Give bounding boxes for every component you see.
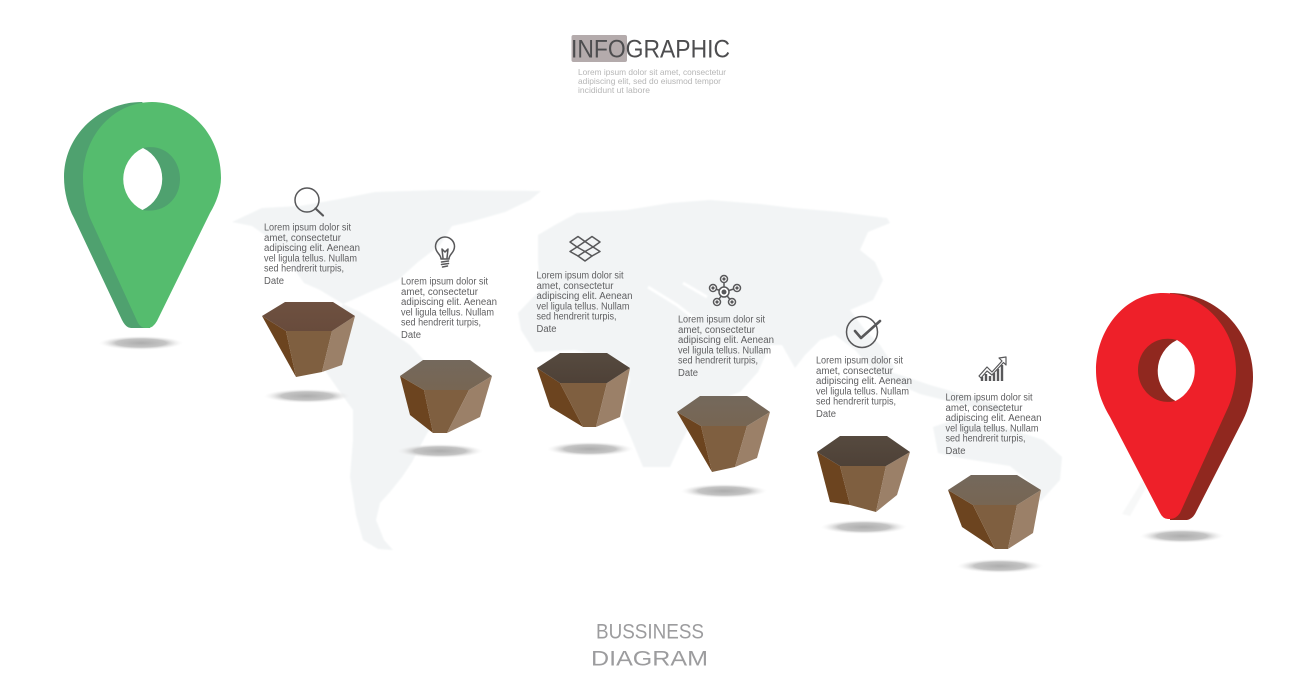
map: Eurasia and Africa [518,200,895,467]
footer heading: Bussiness Diagram: DIAGRAM [591,648,708,670]
shadow 5 [821,520,907,534]
green location pin [64,102,221,328]
step 1: search [262,188,360,403]
map: Australia [933,418,1062,502]
text block 1: amet, consectetur [264,233,342,244]
text block 3: vel ligula tellus. Nullam [536,301,630,312]
map: North America [232,190,541,304]
hexagon block 4 [677,396,770,472]
text block 3: sed hendrerit turpis, [536,312,616,322]
shadow 6 [957,559,1043,573]
step 6: growth [946,357,1043,573]
text block 6: amet, consectetur [946,403,1023,414]
map: New Zealand [1122,480,1146,516]
red location pin [1096,293,1253,520]
text block 3: Date [536,324,557,335]
subtitle text: incididunt ut labore [578,85,650,95]
text block 3: amet, consectetur [536,281,614,292]
text block 4: amet, consectetur [678,325,756,336]
text block 6: Date [946,446,966,457]
green pin shadow [99,336,183,350]
text block 2: Lorem ipsum dolor sit [401,276,488,288]
hexagon block 3 [537,353,630,427]
subtitle text: Lorem ipsum dolor sit amet, consectetur [578,67,726,77]
text block 1: adipiscing elit. Aenean [264,243,360,254]
title: INFOGRAPHIC: INFOGRAPHIC [571,36,730,64]
step 3: boxes [536,236,633,456]
text block 5 [816,356,912,420]
text block 5: Date [816,409,836,420]
icon: people network [710,276,740,306]
hexagon block 2 [400,360,492,433]
subtitle text [578,67,726,95]
map: inland seas [648,283,707,319]
text block 1: vel ligula tellus. Nullam [264,253,357,264]
footer heading: Bussiness Diagram: BUSSINESS [596,620,704,644]
text block 2: Date [401,330,421,341]
step 2: idea [397,237,497,458]
step 5: check [816,316,912,534]
footer heading: Bussiness Diagram [591,620,708,670]
hexagon block 1 [262,302,355,377]
text block 3: Lorem ipsum dolor sit [536,270,624,282]
icon: growth chart [979,357,1006,381]
text block 2: amet, consectetur [401,287,479,298]
text block 4: vel ligula tellus. Nullam [678,345,771,356]
text block 4: adipiscing elit. Aenean [678,335,774,346]
map: South America [322,304,442,550]
text block 6: Lorem ipsum dolor sit [946,392,1033,404]
icon: light bulb [436,237,454,267]
map: Indonesian islands [884,370,1010,414]
icon: check circle [846,316,880,348]
world map background [232,190,1146,550]
text block 1 [264,222,360,287]
text block 5: sed hendrerit turpis, [816,396,896,408]
shadow 3 [547,442,633,456]
text block 6: adipiscing elit. Aenean [946,413,1042,424]
subtitle text: adipiscing elit, sed do eiusmod tempor [578,76,721,86]
text block 1: Lorem ipsum dolor sit [264,222,351,234]
text block 6 [946,392,1042,457]
text block 2 [401,276,497,341]
text block 2: sed hendrerit turpis, [401,318,481,328]
text block 5: Lorem ipsum dolor sit [816,356,903,366]
icon: magnifier [295,188,323,216]
text block 4: sed hendrerit turpis, [678,356,758,366]
text block 3 [536,270,632,335]
text block 5: adipiscing elit. Aenean [816,376,912,387]
step 4: network [677,276,774,498]
icon: open box [570,236,600,261]
text block 1: Date [264,276,284,287]
red pin shadow [1140,529,1224,543]
text block 4: Date [678,368,698,379]
hexagon block 5 [817,436,910,512]
text block 6: vel ligula tellus. Nullam [946,423,1038,434]
text block 4 [678,314,774,379]
text block 4: Lorem ipsum dolor sit [678,314,765,326]
text block 2: vel ligula tellus. Nullam [401,307,494,318]
hexagon block 6 [948,475,1041,549]
shadow 4 [681,484,767,498]
shadow 1 [264,389,350,403]
text block 6: sed hendrerit turpis, [946,434,1026,444]
text block 5: amet, consectetur [816,366,894,377]
text block 3: adipiscing elit. Aenean [536,291,632,302]
text block 1: sed hendrerit turpis, [264,264,344,274]
shadow 2 [397,444,483,458]
text block 2: adipiscing elit. Aenean [401,297,497,308]
text block 5: vel ligula tellus. Nullam [816,386,909,397]
